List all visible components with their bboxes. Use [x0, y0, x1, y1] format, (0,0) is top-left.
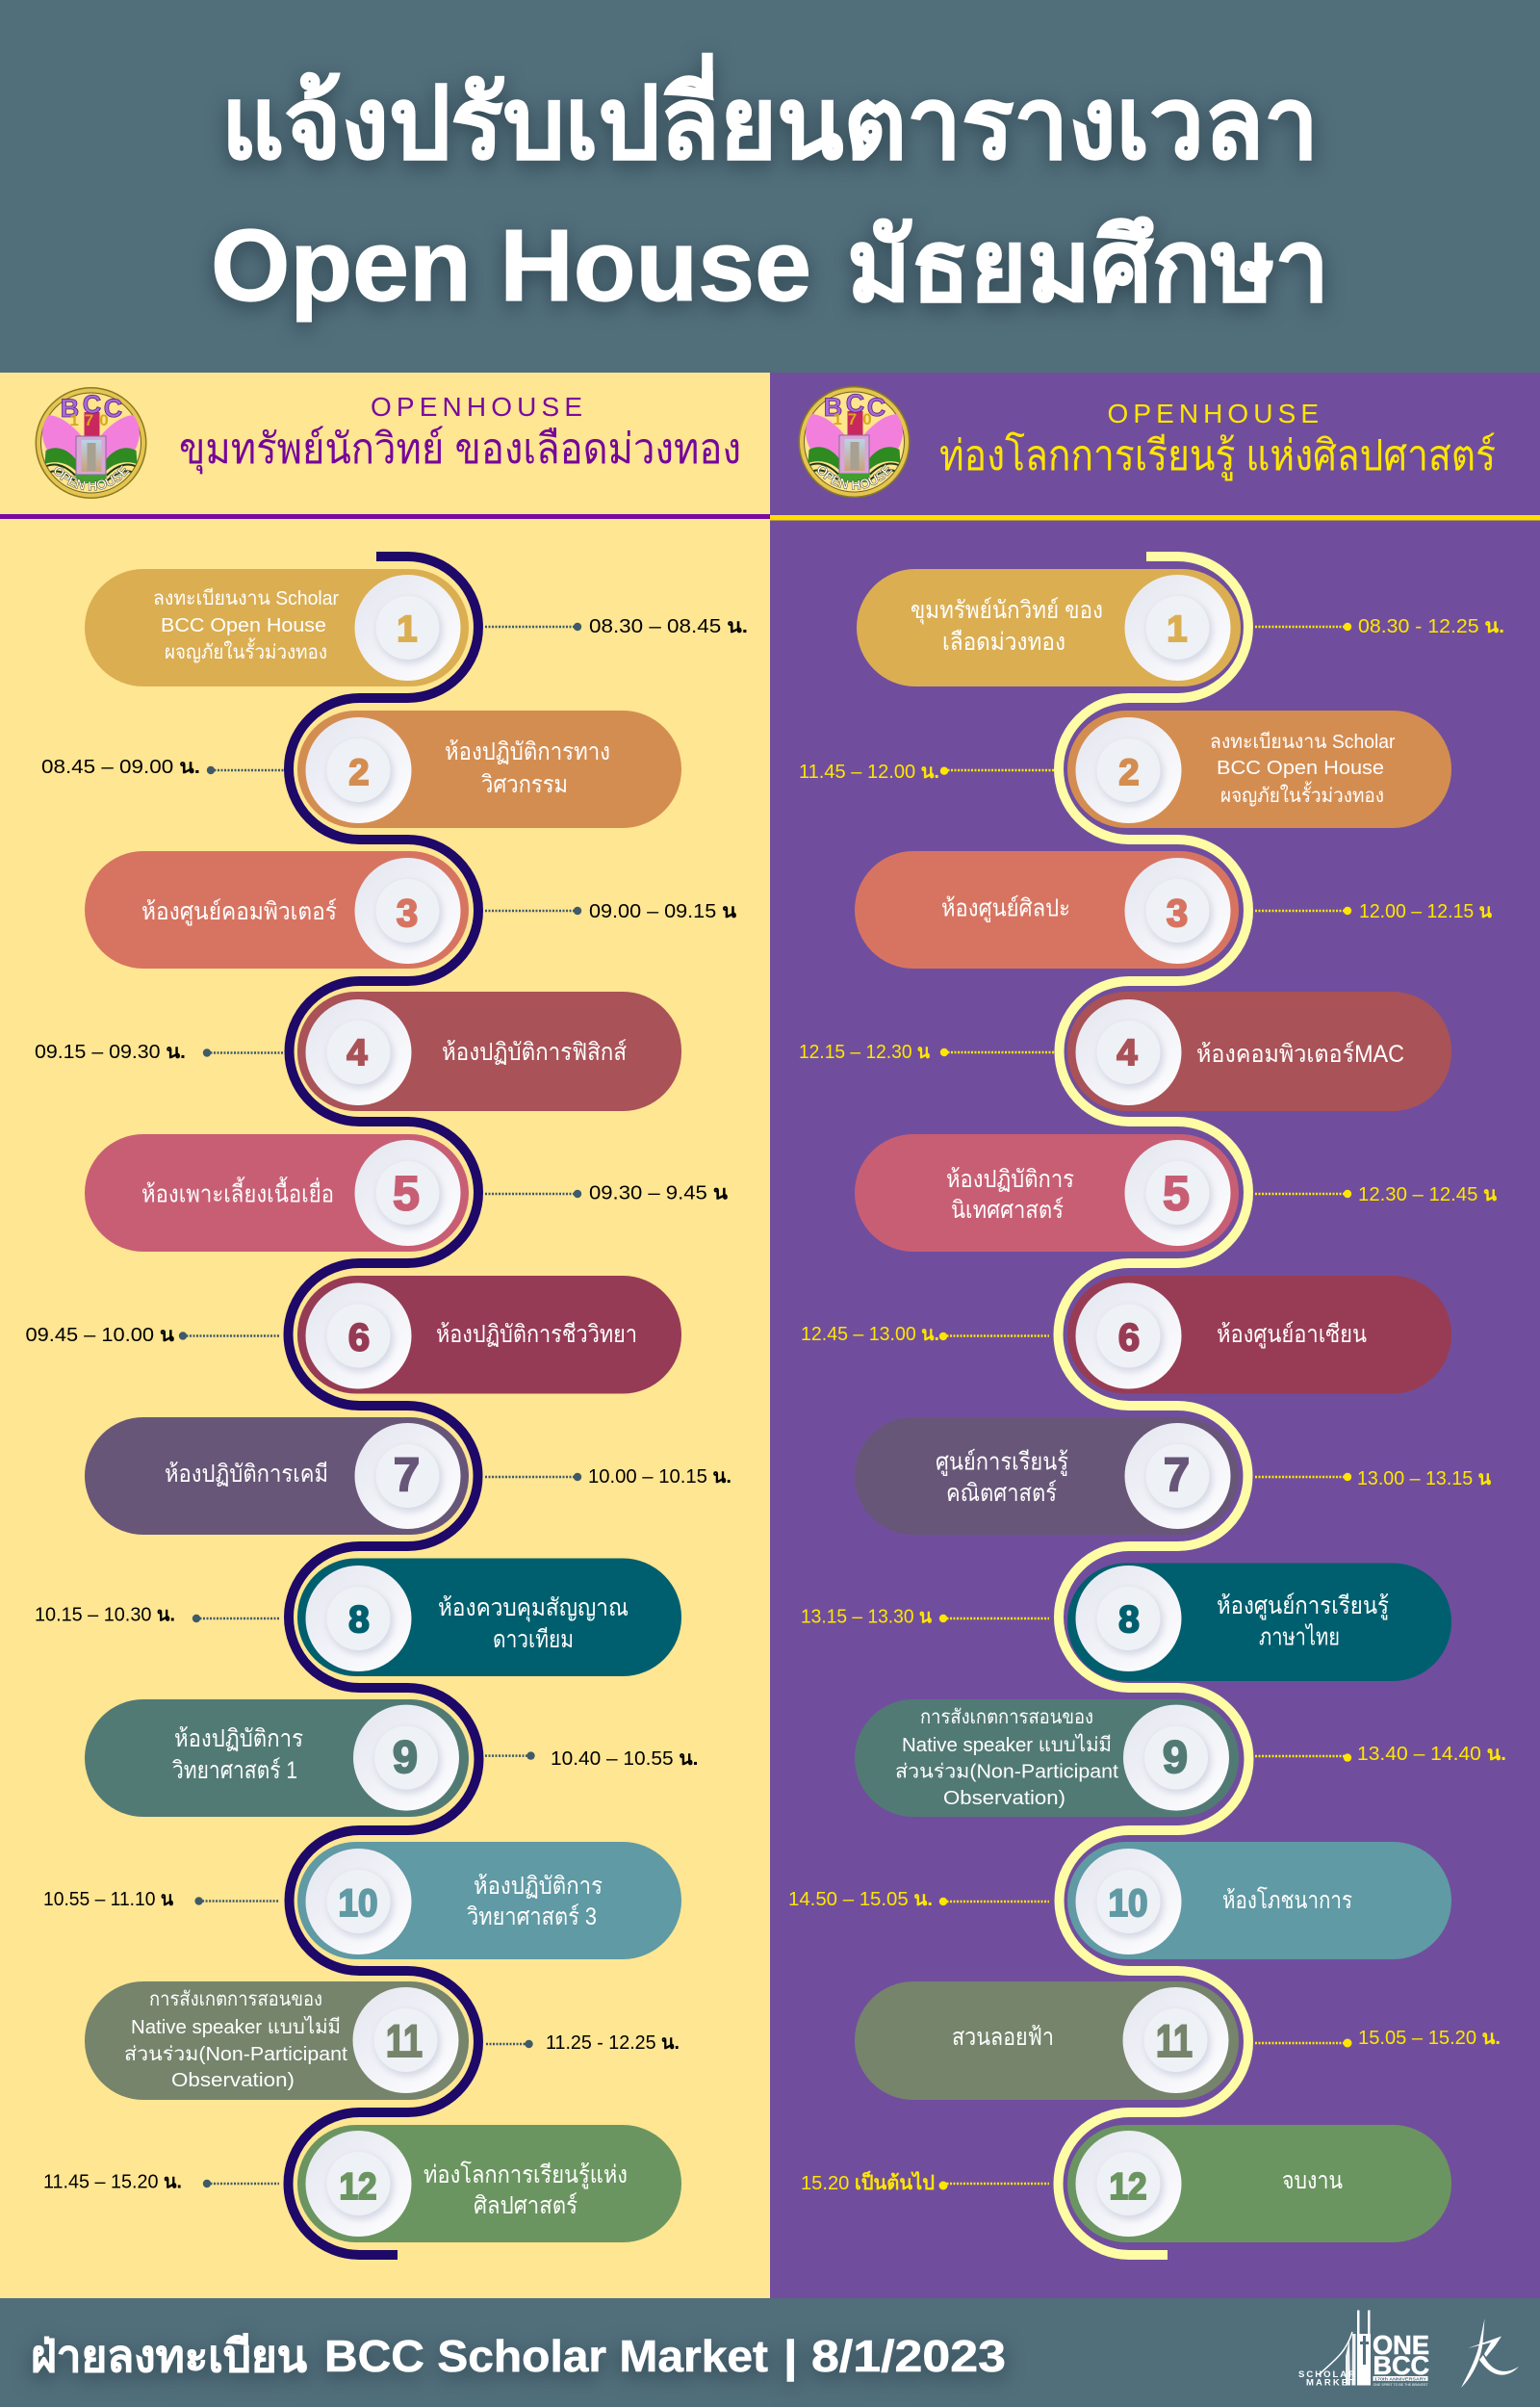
- step 1: 08.30 – 08.45 น.: [589, 615, 748, 637]
- left badge logo: [35, 387, 146, 499]
- footer band: [0, 2298, 1540, 2407]
- step 4: ห้องคอมพิวเตอร์MAC: [1196, 1041, 1404, 1068]
- step 8: [801, 1564, 1451, 1681]
- step 1: 1: [397, 609, 418, 650]
- step 8: ดาวเทียม: [493, 1626, 574, 1653]
- step 1: 08.30 - 12.25 น.: [1358, 615, 1504, 637]
- logo: Scholar Market One BCC: ONE: [1373, 2330, 1429, 2360]
- step 8: 13.15 – 13.30 น: [801, 1606, 932, 1627]
- step 4: [799, 992, 1451, 1111]
- title line 1: แจ้งปรับเปลี่ยนตารางเวลา: [221, 53, 1319, 180]
- header band: [0, 0, 1540, 373]
- left badge logo: 170: [69, 411, 115, 429]
- step 12: 15.20 เป็นต้นไป: [801, 2169, 935, 2194]
- step 5: ห้องเพาะเลี้ยงเนื้อเยื่อ: [141, 1177, 334, 1207]
- step 11: สวนลอยฟ้า: [952, 2024, 1054, 2051]
- step 3: [855, 851, 1492, 969]
- step 12: จบงาน: [1282, 2167, 1343, 2194]
- left panel heading: ขุมทรัพย์นักวิทย์ ของเลือดม่วงทอง: [179, 426, 741, 475]
- step 1: [857, 569, 1504, 686]
- step 11: Native speaker แบบไม่มี: [131, 2015, 341, 2038]
- logo: Scholar Market One BCC: BCC: [1373, 2351, 1429, 2380]
- step 4: 4: [1116, 1033, 1138, 1074]
- step 10: ห้องโภชนาการ: [1222, 1886, 1352, 1914]
- right badge logo: B: [824, 393, 842, 422]
- step 3: ห้องศูนย์ศิลปะ: [941, 895, 1070, 922]
- step 7: 7: [1164, 1450, 1190, 1502]
- panel: left schedule (yellow): [0, 373, 770, 2298]
- step 6: 12.45 – 13.00 น.: [801, 1323, 939, 1345]
- step 7: ศูนย์การเรียนรู้: [936, 1449, 1068, 1477]
- step 3: 09.00 – 09.15 น: [589, 900, 736, 922]
- step 2: [799, 711, 1451, 828]
- step 2: 11.45 – 12.00 น.: [799, 761, 939, 783]
- step 6: [801, 1276, 1451, 1394]
- step 9: การสังเกตการสอนของ: [920, 1706, 1093, 1728]
- title line 2: มัธยมศึกษา: [847, 211, 1329, 323]
- step 10: ห้องปฏิบัติการ: [474, 1873, 603, 1900]
- step 3: 12.00 – 12.15 น: [1359, 900, 1492, 922]
- step 2: ลงทะเบียนงาน Scholar: [1210, 731, 1396, 753]
- step 9: Observation): [943, 1787, 1065, 1809]
- step 10: [43, 1842, 681, 1959]
- left panel rule: [0, 514, 770, 519]
- step 6: ห้องศูนย์อาเซียน: [1217, 1321, 1367, 1349]
- step 9: 10.40 – 10.55 น.: [551, 1747, 699, 1770]
- step 2: วิศวกรรม: [481, 771, 568, 798]
- step 6: ห้องปฏิบัติการชีววิทยา: [436, 1321, 637, 1348]
- step 4: ห้องปฏิบัติการฟิสิกส์: [442, 1039, 627, 1066]
- step 8: 8: [1118, 1599, 1140, 1641]
- step 8: ห้องควบคุมสัญญาณ: [438, 1594, 629, 1622]
- step 11: 11.25 - 12.25 น.: [546, 2032, 680, 2054]
- step 6: 09.45 – 10.00 น: [25, 1324, 174, 1346]
- step 4: [35, 992, 681, 1111]
- step 11: 11: [386, 2015, 423, 2066]
- step 1: ผจญภัยในรั้วม่วงทอง: [165, 637, 327, 663]
- step 10: 14.50 – 15.05 น.: [788, 1888, 933, 1910]
- step 4: 09.15 – 09.30 น.: [35, 1041, 186, 1063]
- logo: Scholar Market One BCC: 170th ANNIVERSARY: [1374, 2376, 1427, 2382]
- step 2: ผจญภัยในรั้วม่วงทอง: [1220, 781, 1384, 807]
- step 6: [25, 1276, 681, 1394]
- step 10: วิทยาศาสตร์ 3: [467, 1903, 597, 1930]
- step 10: [788, 1842, 1451, 1959]
- step 11: Observation): [171, 2069, 295, 2091]
- step 9: 9: [1163, 1731, 1188, 1782]
- step 9: [855, 1699, 1506, 1817]
- right OPENHOUSE label: OPENHOUSE: [1107, 399, 1319, 428]
- right serpentine timeline: [1059, 556, 1249, 2255]
- step 5: [85, 1134, 728, 1252]
- step 9: ห้องปฏิบัติการ: [174, 1725, 303, 1752]
- step 11: การสังเกตการสอนของ: [149, 1988, 322, 2010]
- step 2: 2: [1118, 753, 1140, 793]
- step 6: 6: [1118, 1316, 1140, 1359]
- step 8: 10.15 – 10.30 น.: [35, 1604, 175, 1626]
- step 2: 2: [348, 753, 370, 793]
- step 7: [855, 1417, 1491, 1535]
- right badge logo: C: [867, 393, 886, 422]
- step 5: นิเทศศาสตร์: [951, 1197, 1064, 1224]
- step 11: 11: [1156, 2015, 1193, 2066]
- step 3: [85, 851, 736, 969]
- logo: Scholar Market One BCC: SCHOLAR: [1298, 2369, 1355, 2380]
- step 4: 4: [346, 1033, 368, 1074]
- step 8: [35, 1558, 681, 1676]
- panel: right schedule (purple): [770, 373, 1540, 2298]
- step 7: 10.00 – 10.15 น.: [588, 1465, 732, 1488]
- left badge logo: B: [61, 394, 79, 423]
- step 9: [85, 1699, 699, 1817]
- step 1: BCC Open House: [161, 614, 326, 636]
- step 2: 08.45 – 09.00 น.: [41, 756, 200, 778]
- step 6: 6: [348, 1316, 370, 1359]
- step 12: 12: [1109, 2166, 1147, 2208]
- title line 2: Open House: [211, 209, 811, 323]
- footer credit: [31, 2331, 1006, 2381]
- step 11: ส่วนร่วม(Non-Participant: [124, 2043, 347, 2065]
- step 5: 12.30 – 12.45 น: [1358, 1183, 1497, 1205]
- step 10: 10: [1109, 1882, 1147, 1925]
- step 9: 9: [393, 1731, 418, 1782]
- footer credit: BCC Scholar Market: [324, 2331, 768, 2381]
- logo: Scholar Market One BCC: [1298, 2311, 1429, 2388]
- step 2: ห้องปฏิบัติการทาง: [445, 738, 610, 765]
- logo: Scholar Market One BCC: MARKET: [1306, 2378, 1355, 2388]
- step 5: [855, 1134, 1497, 1252]
- step 1: ขุมทรัพย์นักวิทย์ ของ: [911, 597, 1103, 625]
- step 5: 5: [393, 1167, 420, 1221]
- footer credit: ฝ่ายลงทะเบียน: [31, 2331, 308, 2381]
- footer credit: | 8/1/2023: [783, 2331, 1006, 2381]
- step 3: 3: [1167, 893, 1188, 935]
- logo: Scholar Market One BCC: ONE SPIRIT TO BE THE BRAVEST: [1373, 2383, 1428, 2387]
- step 1: [85, 569, 748, 686]
- step 12: ท่องโลกการเรียนรู้แห่ง: [424, 2161, 628, 2189]
- title line 2: [211, 209, 1329, 323]
- step 12: [801, 2125, 1451, 2242]
- step 12: 11.45 – 15.20 น.: [43, 2171, 182, 2193]
- step 1: 1: [1167, 609, 1188, 650]
- step 11: 15.05 – 15.20 น.: [1358, 2027, 1501, 2049]
- step 9: Native speaker แบบไม่มี: [902, 1733, 1112, 1756]
- step 7: 13.00 – 13.15 น: [1357, 1467, 1491, 1489]
- left badge logo: C: [104, 394, 122, 423]
- step 11: [855, 1981, 1501, 2100]
- step 1: ลงทะเบียนงาน Scholar: [153, 587, 339, 609]
- right panel rule: [770, 515, 1540, 520]
- step 5: 5: [1163, 1167, 1190, 1221]
- left badge logo: C: [83, 390, 101, 419]
- right badge logo: 170: [833, 410, 878, 428]
- step 2: [41, 711, 681, 828]
- logo: brush signature: [1461, 2318, 1519, 2388]
- left OPENHOUSE label: OPENHOUSE: [371, 392, 582, 422]
- step 7: ห้องปฏิบัติการเคมี: [165, 1461, 328, 1488]
- step 3: 3: [397, 893, 418, 935]
- step 3: ห้องศูนย์คอมพิวเตอร์: [141, 898, 337, 926]
- step 7: คณิตศาสตร์: [946, 1480, 1057, 1507]
- left serpentine timeline: [289, 556, 479, 2255]
- right badge logo: C: [846, 389, 864, 418]
- step 10: 10: [339, 1882, 377, 1925]
- step 2: BCC Open House: [1217, 757, 1384, 779]
- step 11: [85, 1981, 680, 2100]
- step 8: 8: [348, 1599, 370, 1641]
- step 12: [43, 2125, 681, 2242]
- step 5: 09.30 – 9.45 น: [589, 1182, 728, 1204]
- step 4: 12.15 – 12.30 น: [799, 1041, 930, 1063]
- step 9: 13.40 – 14.40 น.: [1357, 1743, 1506, 1765]
- step 1: เลือดม่วงทอง: [942, 629, 1065, 656]
- step 10: 10.55 – 11.10 น: [43, 1888, 173, 1910]
- step 7: 7: [394, 1450, 420, 1502]
- right badge logo: OPEN HOUSE: [817, 464, 893, 490]
- right badge logo: [799, 386, 911, 498]
- step 5: ห้องปฏิบัติการ: [946, 1166, 1074, 1193]
- step 8: ภาษาไทย: [1259, 1623, 1340, 1650]
- step 9: ส่วนร่วม(Non-Participant: [895, 1761, 1118, 1783]
- step 9: วิทยาศาสตร์ 1: [172, 1757, 297, 1784]
- step 12: ศิลปศาสตร์: [474, 2192, 578, 2219]
- step 7: [85, 1417, 732, 1535]
- left badge logo: OPEN HOUSE: [54, 464, 129, 491]
- step 12: 12: [339, 2166, 377, 2208]
- step 8: ห้องศูนย์การเรียนรู้: [1217, 1592, 1389, 1620]
